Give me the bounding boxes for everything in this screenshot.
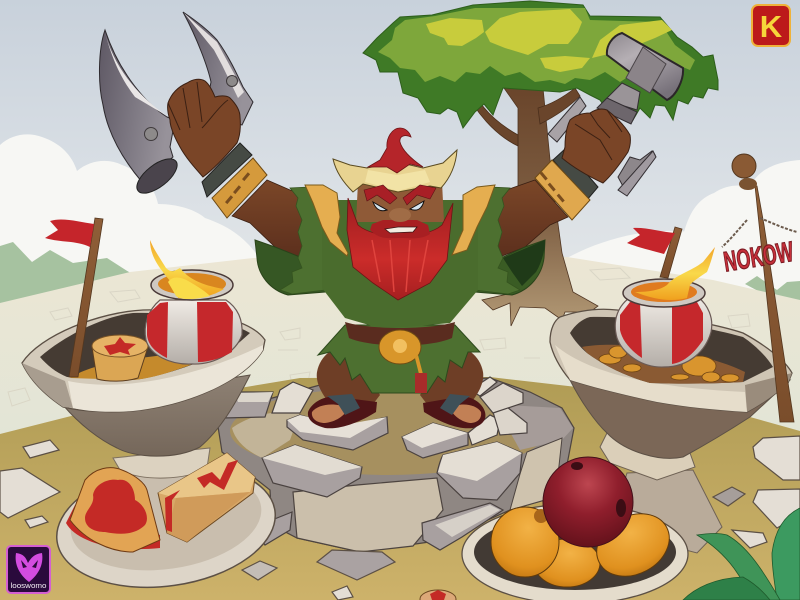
inner — [570, 317, 773, 384]
moustache — [370, 220, 430, 238]
rivet — [144, 128, 158, 140]
upper blade highlight — [184, 13, 244, 98]
right bracer — [553, 149, 598, 200]
legs — [317, 345, 380, 415]
foreground arena ground — [0, 377, 800, 600]
tunic skirt — [318, 325, 480, 393]
left flag — [45, 218, 103, 377]
trunk and roots — [482, 88, 598, 326]
helmet centre plate — [365, 170, 430, 191]
clouds — [0, 134, 800, 320]
canopy highlights — [426, 9, 672, 72]
red ball — [543, 457, 633, 547]
mouth — [385, 227, 417, 233]
beard — [347, 198, 453, 300]
left shoulder plate — [305, 185, 348, 256]
right fist — [562, 109, 630, 183]
fruit right — [586, 502, 680, 588]
lower blade — [99, 30, 175, 182]
left axe — [99, 12, 267, 218]
left sandal — [308, 394, 377, 428]
contents — [582, 345, 745, 384]
drum top — [92, 335, 148, 357]
purple logo badge — [7, 546, 50, 593]
pedestal stem — [113, 448, 210, 478]
plain ground markings — [8, 268, 750, 406]
left food items — [66, 453, 255, 552]
left fist — [168, 79, 240, 177]
hammer neck — [605, 83, 640, 110]
contents — [70, 346, 236, 380]
warrior — [232, 128, 568, 428]
eyes — [373, 202, 387, 211]
canopy dark layer — [363, 1, 718, 128]
left forearm — [232, 180, 305, 258]
K badge — [752, 5, 790, 46]
nose — [389, 208, 411, 222]
fruit middle — [534, 539, 600, 587]
beard strands — [372, 240, 428, 292]
grip ring — [597, 98, 637, 124]
belt — [345, 322, 455, 346]
rim front highlight — [555, 345, 747, 412]
rim — [550, 309, 792, 412]
canopy mid layer — [378, 8, 695, 84]
lower stem — [618, 151, 655, 190]
central block — [293, 478, 443, 552]
ground token — [420, 590, 456, 600]
right sandal — [423, 394, 485, 428]
upper blade — [183, 12, 253, 125]
inner — [40, 313, 250, 380]
left gold band — [212, 158, 267, 218]
back plate — [548, 97, 586, 142]
red spread — [85, 480, 147, 534]
left gold band marks — [225, 172, 250, 204]
right offering plate — [462, 457, 688, 600]
right pot with flame — [615, 247, 715, 367]
sky background — [0, 0, 800, 330]
gold lumps — [599, 346, 739, 382]
cone — [63, 375, 250, 456]
face — [356, 182, 444, 222]
rear and side wall — [217, 378, 574, 552]
fruit left — [491, 507, 559, 577]
right shoulder plate — [452, 185, 495, 255]
right pedestal base — [600, 433, 722, 553]
right wall block — [510, 438, 562, 510]
right gold band — [535, 160, 590, 220]
rim right facet — [745, 373, 792, 412]
right flag — [627, 227, 682, 278]
right hammer — [535, 33, 683, 220]
right forearm — [495, 180, 568, 258]
right branch — [538, 88, 580, 124]
K badge: K — [760, 9, 783, 44]
left pedestal bowl — [22, 310, 265, 456]
torso — [322, 200, 478, 329]
scattered stones — [0, 436, 800, 600]
belt buckle — [379, 330, 427, 393]
left sleeve cuff — [280, 187, 330, 294]
red sauce under bread — [66, 505, 160, 549]
rim front highlight — [68, 345, 263, 412]
pommel — [618, 151, 656, 196]
left pot with flame — [145, 240, 242, 364]
left sleeve — [255, 240, 325, 295]
cone — [570, 380, 790, 458]
distant hills — [0, 242, 800, 305]
hair crest — [368, 128, 423, 173]
platform top — [230, 387, 546, 475]
left offering plate — [49, 448, 283, 600]
bread — [70, 468, 160, 552]
right gold band marks — [540, 172, 565, 202]
axe cap — [131, 153, 183, 199]
left bracer — [202, 143, 252, 197]
rim left facet — [22, 363, 73, 408]
stepping stones — [223, 377, 527, 550]
palm leaves — [683, 508, 800, 600]
left branch — [463, 84, 518, 146]
stone dais — [217, 377, 574, 552]
right sleeve — [475, 240, 545, 295]
hammer head — [607, 33, 683, 100]
helmet — [333, 150, 457, 192]
right sleeve lining — [503, 240, 545, 286]
brows — [364, 185, 397, 204]
signpost — [722, 154, 797, 422]
tree — [363, 1, 718, 326]
mid ground plain — [0, 254, 800, 440]
purple logo badge: looswomo — [10, 581, 46, 590]
wooden block — [158, 453, 255, 542]
wooden drum — [92, 347, 148, 381]
right pedestal bowl — [550, 309, 792, 458]
hammer collar — [626, 47, 666, 93]
rim — [22, 310, 265, 412]
right sleeve cuff — [470, 187, 520, 294]
lower blade edge highlight — [105, 32, 167, 116]
